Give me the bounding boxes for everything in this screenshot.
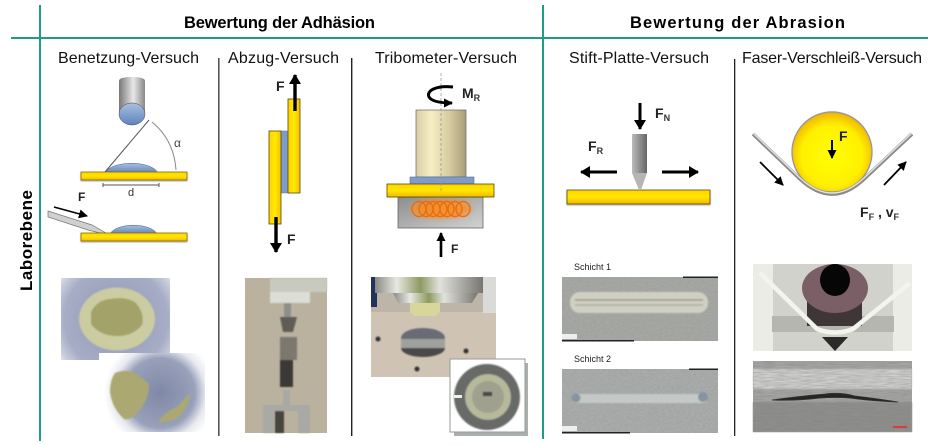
- label: F_N: F: [655, 105, 664, 121]
- label: M_R: M: [462, 85, 474, 101]
- photo: detached droplet micrograph: [99, 353, 205, 432]
- label: F_F, v_F: F: [894, 212, 900, 222]
- photo: fibre wear rig: [753, 264, 912, 351]
- arrow: up: [293, 75, 297, 111]
- arrow: fibre out: [884, 162, 906, 185]
- photo: pull-off test machine: [245, 278, 327, 433]
- heater block: [398, 197, 483, 228]
- label: Schicht 2: Schicht 2: [574, 354, 611, 364]
- arrow: up force: [440, 233, 442, 257]
- label: d: d: [128, 187, 134, 199]
- label: F_R: F: [588, 138, 597, 154]
- icon: dosing needle with droplet: [119, 77, 145, 125]
- arrow: rotation: [428, 87, 453, 103]
- label: F_F, v_F: , v: [874, 204, 894, 220]
- arrow: down: [274, 217, 278, 252]
- label: Schicht 1: Schicht 1: [574, 262, 611, 272]
- heading: Tribometer-Versuch: Tribometer-Versuch: [375, 50, 517, 67]
- heading: Abzug-Versuch: Abzug-Versuch: [228, 50, 339, 67]
- yellow plate: [81, 233, 187, 241]
- arrow: right: [662, 170, 698, 174]
- diagram: Abzug: [269, 75, 300, 252]
- axis: [440, 73, 442, 193]
- heating coil: [411, 200, 471, 218]
- photo: fibre wear micrograph: [753, 361, 912, 432]
- photo: droplet micrograph: [61, 278, 170, 360]
- cream cylinder: [416, 110, 466, 177]
- arrow: normal force: [638, 103, 642, 129]
- droplet being scraped: [110, 225, 157, 234]
- row label: Laborebene: Laborebene: [17, 190, 36, 291]
- heading: Benetzung-Versuch: Benetzung-Versuch: [58, 50, 199, 67]
- label: F_F, v_F: F: [869, 212, 875, 222]
- upper yellow bar: [288, 99, 300, 193]
- blue layer: [410, 177, 474, 185]
- contact angle construction: [103, 120, 176, 187]
- label: F_F, v_F: F: [860, 204, 869, 220]
- label: alpha: α: [174, 136, 181, 150]
- label: F_N: N: [664, 113, 670, 123]
- label: M_R: R: [474, 93, 481, 103]
- yellow plate: [387, 184, 494, 197]
- label: F top: F: [276, 78, 285, 94]
- heading: Faser-Verschleiß-Versuch: Faser-Verschleiß-Versuch: [742, 50, 922, 67]
- arrow: fibre in: [760, 162, 783, 185]
- photo: wear track layer 1: [562, 276, 718, 342]
- diagram: Benetzung: [48, 77, 187, 241]
- fibre: [753, 133, 912, 194]
- adhesive layer: [280, 131, 289, 193]
- yellow ball: [792, 112, 872, 192]
- photo: tested disc inset: [450, 359, 528, 436]
- yellow plate: [81, 172, 187, 180]
- photo: wear track layer 2: [562, 368, 718, 434]
- arrow: force on ball: [831, 140, 833, 158]
- label: F: F: [451, 242, 458, 256]
- label: F_R: R: [597, 146, 604, 156]
- arrow: left: [581, 170, 617, 174]
- lower yellow bar: [269, 131, 281, 224]
- label: F bottom: F: [287, 231, 296, 247]
- yellow plate: [567, 190, 710, 204]
- diagram: Stift-Platte: [567, 103, 710, 204]
- label: F: F: [839, 128, 848, 144]
- heading: Stift-Platte-Versuch: Stift-Platte-Versuch: [569, 50, 709, 67]
- icon: scraping needle: [48, 211, 106, 233]
- diagram: Tribometer: [387, 73, 494, 257]
- droplet on plate: [105, 163, 158, 173]
- pin: [632, 134, 647, 190]
- label: F: F: [78, 190, 85, 204]
- heading: Bewertung der Abrasion: Bewertung der Abrasion: [630, 14, 845, 32]
- photo: tribometer setup: [371, 277, 496, 377]
- arrow: needle direction: [54, 207, 87, 216]
- diagram: Faser-Verschleiß: [753, 112, 912, 222]
- heading: Bewertung der Adhäsion: Bewertung der Adhäsion: [184, 14, 375, 32]
